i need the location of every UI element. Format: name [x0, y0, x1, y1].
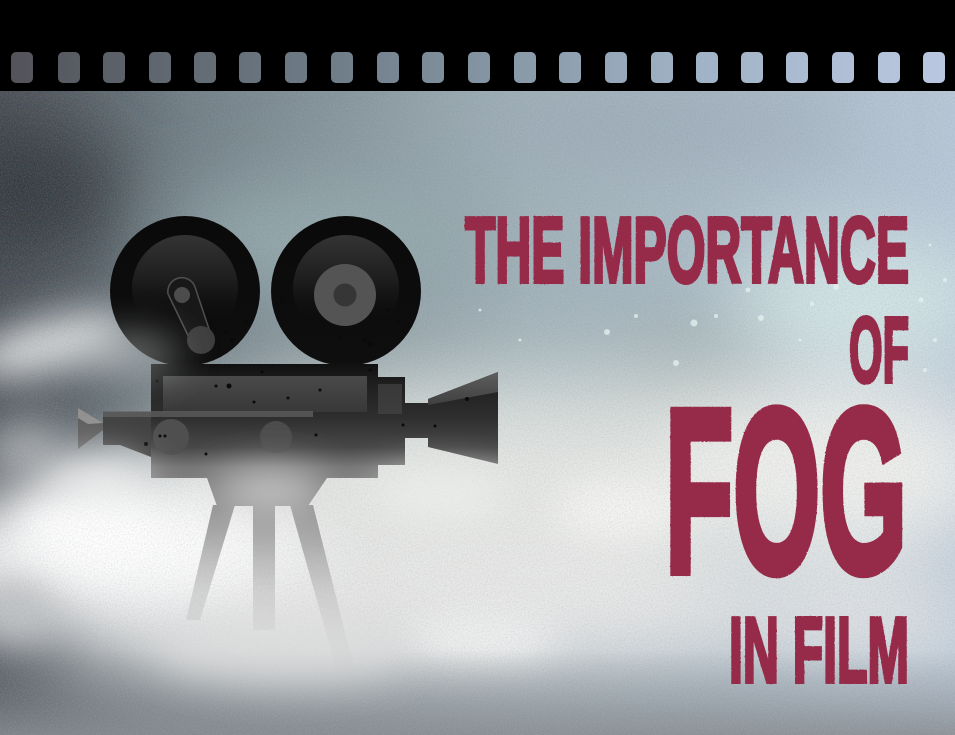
paint specks [144, 298, 469, 456]
camera body [151, 364, 429, 478]
fog drifting over camera [40, 335, 510, 685]
rear housing [78, 408, 313, 457]
film strip [0, 0, 955, 91]
sprocket holes [11, 52, 945, 83]
title [465, 198, 909, 702]
paint splatter on sky [478, 244, 947, 372]
film camera on tripod [78, 216, 498, 700]
right reel [271, 216, 421, 366]
tripod [186, 478, 362, 700]
left reel [110, 216, 260, 366]
reel arm [168, 278, 212, 352]
lens [428, 372, 498, 464]
bottom grey fog edge [0, 650, 955, 735]
